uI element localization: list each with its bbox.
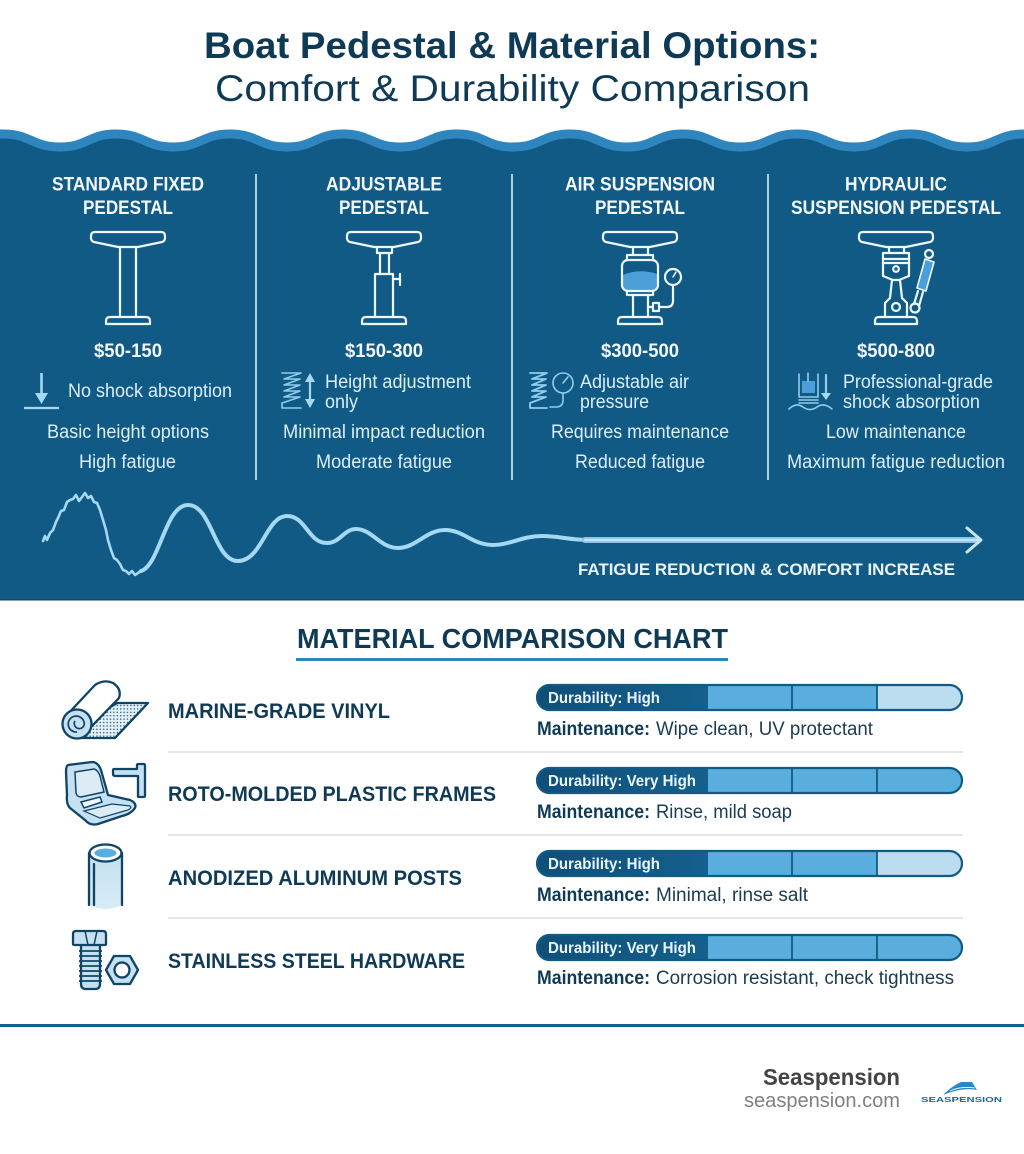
heading: STANDARD FIXED: [52, 174, 204, 196]
row: roto-molded plastic frames: [66, 762, 962, 824]
title: Boat Pedestal & Material Options:: [204, 25, 820, 66]
icon: aluminum tube: [89, 844, 122, 909]
maintenance: Rinse, mild soap: [656, 802, 792, 823]
maintenance: [537, 885, 809, 906]
heading: [326, 174, 442, 219]
durability bar: [537, 935, 962, 960]
maintenance: [537, 802, 792, 823]
features: [787, 372, 1005, 473]
heading: HYDRAULIC: [845, 174, 947, 196]
features: High fatigue: [79, 452, 176, 473]
column: hydraulic suspension pedestal: [787, 174, 1005, 473]
icon: seat and bracket: [66, 762, 145, 824]
features: Minimal impact reduction: [283, 422, 485, 443]
features: [551, 372, 729, 473]
features: Maximum fatigue reduction: [787, 452, 1005, 473]
price: $150-300: [345, 341, 423, 362]
heading: [791, 174, 1001, 219]
features: Basic height options: [47, 422, 209, 443]
heading: ADJUSTABLE: [326, 174, 442, 196]
row: anodized aluminum posts: [89, 844, 962, 909]
row: stainless steel hardware: [73, 931, 962, 989]
title: [204, 25, 820, 109]
title: Comfort & Durability Comparison: [215, 68, 810, 109]
maintenance: Corrosion resistant, check tightness: [656, 968, 954, 989]
maintenance: Maintenance:: [537, 885, 650, 906]
price: $50-150: [94, 341, 162, 362]
price: $300-500: [601, 341, 679, 362]
icon: vinyl roll: [62, 681, 148, 738]
durability bar: Durability: High: [548, 690, 660, 707]
label: MARINE-GRADE VINYL: [168, 699, 390, 723]
footer rule: [0, 1024, 1024, 1027]
icon: air suspension pedestal: [603, 232, 681, 324]
features: No shock absorption: [68, 381, 232, 402]
icon: fixed pedestal: [91, 232, 165, 324]
column: standard fixed pedestal: [24, 174, 232, 473]
maintenance: [537, 719, 874, 740]
features: shock absorption: [843, 392, 980, 413]
heading: material comparison chart: MATERIAL COMPARISON CHART: [297, 623, 728, 654]
icon: spring and double arrow: [282, 373, 315, 408]
heading: PEDESTAL: [339, 198, 429, 219]
label: ANODIZED ALUMINUM POSTS: [168, 866, 462, 890]
features: Height adjustment: [325, 372, 472, 393]
durability bar: [537, 685, 962, 710]
features: [283, 372, 485, 473]
row dividers: [168, 752, 963, 918]
wave background: [0, 134, 1024, 600]
durability bar: Durability: Very High: [548, 940, 696, 957]
durability bar: [537, 851, 962, 876]
heading: [565, 174, 715, 219]
column: air suspension pedestal: [530, 174, 729, 473]
dividers: [256, 174, 768, 480]
label: STAINLESS STEEL HARDWARE: [168, 949, 465, 973]
features: Reduced fatigue: [575, 452, 705, 473]
footer brand: Seaspension: [763, 1064, 900, 1090]
heading: PEDESTAL: [595, 198, 685, 219]
logo: SEASPENSION: [921, 1095, 1002, 1104]
price: $500-800: [857, 341, 935, 362]
features: [47, 381, 232, 473]
durability bar: Durability: High: [548, 856, 660, 873]
footer brand: [744, 1064, 900, 1112]
maintenance: Maintenance:: [537, 968, 650, 989]
maintenance: Maintenance:: [537, 802, 650, 823]
icon: spring and gauge: [530, 373, 573, 408]
column: adjustable pedestal: [282, 174, 485, 473]
row: marine-grade vinyl: [62, 681, 962, 740]
features: only: [325, 392, 358, 413]
caption: FATIGUE REDUCTION & COMFORT INCREASE: [578, 560, 955, 579]
durability bar: [537, 768, 962, 793]
heading: SUSPENSION PEDESTAL: [791, 198, 1001, 219]
features: pressure: [580, 392, 649, 413]
footer brand: seaspension.com: [744, 1090, 900, 1112]
features: Moderate fatigue: [316, 452, 452, 473]
icon: damper and wave: [789, 373, 832, 410]
heading: [52, 174, 204, 219]
features: Adjustable air: [580, 372, 690, 393]
features: Requires maintenance: [551, 422, 729, 443]
features: Low maintenance: [826, 422, 966, 443]
icon: down arrow on surface: [24, 373, 59, 408]
features: Professional-grade: [843, 372, 993, 393]
durability bar: Durability: Very High: [548, 773, 696, 790]
panel: pedestal comparison: [0, 134, 1024, 600]
chart: damped vibration wave arrow: [43, 493, 981, 575]
logo: [921, 1082, 1002, 1104]
icon: hydraulic pedestal: [859, 232, 934, 324]
maintenance: Wipe clean, UV protectant: [656, 719, 874, 740]
heading: AIR SUSPENSION: [565, 174, 715, 196]
icon: bolt and nut: [73, 931, 138, 989]
label: ROTO-MOLDED PLASTIC FRAMES: [168, 782, 496, 806]
icon: adjustable pedestal: [347, 232, 421, 324]
maintenance: Minimal, rinse salt: [656, 885, 809, 906]
maintenance: Maintenance:: [537, 719, 650, 740]
heading: PEDESTAL: [83, 198, 173, 219]
